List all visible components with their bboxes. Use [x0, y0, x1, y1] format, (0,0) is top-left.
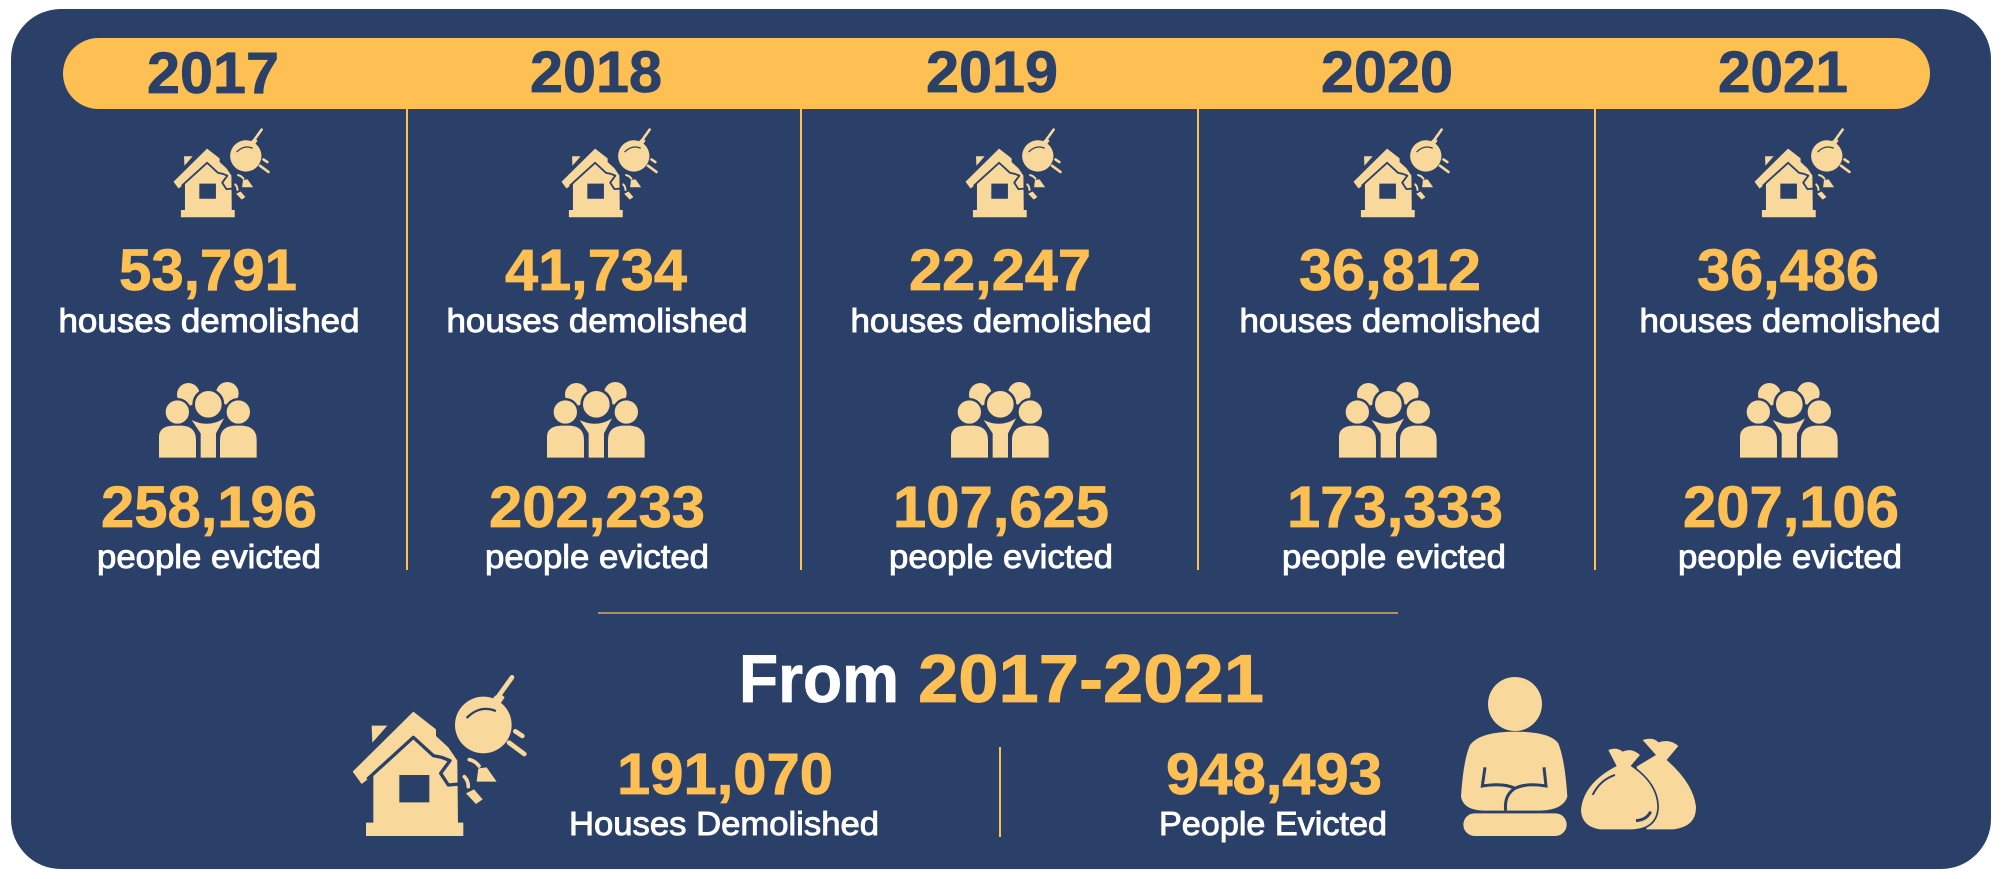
column: 2020 [1240, 130, 1540, 575]
timeline year bar: 2018 [530, 40, 662, 105]
houses demolished 2021: houses demolished [1640, 302, 1940, 339]
people evicted 2017 [97, 475, 321, 575]
people evicted 2018: 202,233 [489, 475, 705, 540]
column: 2018 [446, 130, 748, 575]
people evicted 2020: people evicted [1282, 538, 1506, 575]
people evicted 2021: 207,106 [1683, 475, 1899, 540]
people evicted 2020: 173,333 [1287, 475, 1503, 540]
summary heading: 2017-2021 [918, 641, 1264, 717]
people evicted 2019 [889, 475, 1113, 575]
icon: people [547, 382, 645, 458]
houses demolished 2017: houses demolished [58, 302, 360, 339]
total people evicted [1159, 742, 1387, 842]
column: 2019 [850, 130, 1152, 575]
icon: seated person with bags [1461, 677, 1696, 836]
total houses demolished [569, 742, 879, 842]
houses demolished 2019 [850, 238, 1152, 339]
icon: demolished house [562, 130, 656, 217]
total people evicted: 948,493 [1166, 742, 1382, 807]
people evicted 2018: people evicted [485, 538, 709, 575]
icon: people [159, 382, 257, 458]
people evicted 2018 [485, 475, 709, 575]
timeline year bar: 2021 [1718, 40, 1848, 105]
timeline year bar: 2020 [1321, 40, 1453, 105]
houses demolished 2020 [1240, 238, 1540, 339]
people evicted 2019: people evicted [889, 538, 1113, 575]
icon: demolished house [1354, 130, 1448, 217]
houses demolished 2020: 36,812 [1299, 238, 1481, 303]
houses demolished 2021 [1640, 238, 1940, 339]
houses demolished 2018: houses demolished [446, 302, 748, 339]
column: 2021 [1640, 130, 1940, 575]
people evicted 2017: people evicted [97, 538, 321, 575]
total houses demolished: 191,070 [617, 742, 833, 807]
houses demolished 2019: 22,247 [909, 238, 1091, 303]
houses demolished 2018: 41,734 [505, 238, 687, 303]
houses demolished 2017: 53,791 [119, 238, 297, 303]
summary heading: From [739, 641, 899, 717]
icon: people [1339, 382, 1437, 458]
houses demolished 2018 [446, 238, 748, 339]
people evicted 2021 [1678, 475, 1902, 575]
houses demolished 2020: houses demolished [1240, 302, 1540, 339]
icon: people [951, 382, 1049, 458]
total houses demolished: Houses Demolished [569, 805, 879, 842]
people evicted 2019: 107,625 [893, 475, 1109, 540]
timeline year bar: 2017 [147, 41, 279, 106]
total people evicted: People Evicted [1159, 805, 1387, 842]
houses demolished 2021: 36,486 [1697, 238, 1879, 303]
icon: large demolished house [353, 677, 524, 836]
people evicted 2017: 258,196 [101, 475, 317, 540]
icon: demolished house [1755, 130, 1849, 217]
column: 2017 [58, 130, 360, 575]
icon: demolished house [966, 130, 1060, 217]
houses demolished 2019: houses demolished [850, 302, 1152, 339]
summary heading [739, 641, 1264, 717]
icon: demolished house [174, 130, 268, 217]
timeline year bar [63, 38, 1930, 109]
icon: people [1740, 382, 1838, 458]
timeline year bar: 2019 [926, 40, 1058, 105]
houses demolished 2017 [58, 238, 360, 339]
people evicted 2020 [1282, 475, 1506, 575]
people evicted 2021: people evicted [1678, 538, 1902, 575]
